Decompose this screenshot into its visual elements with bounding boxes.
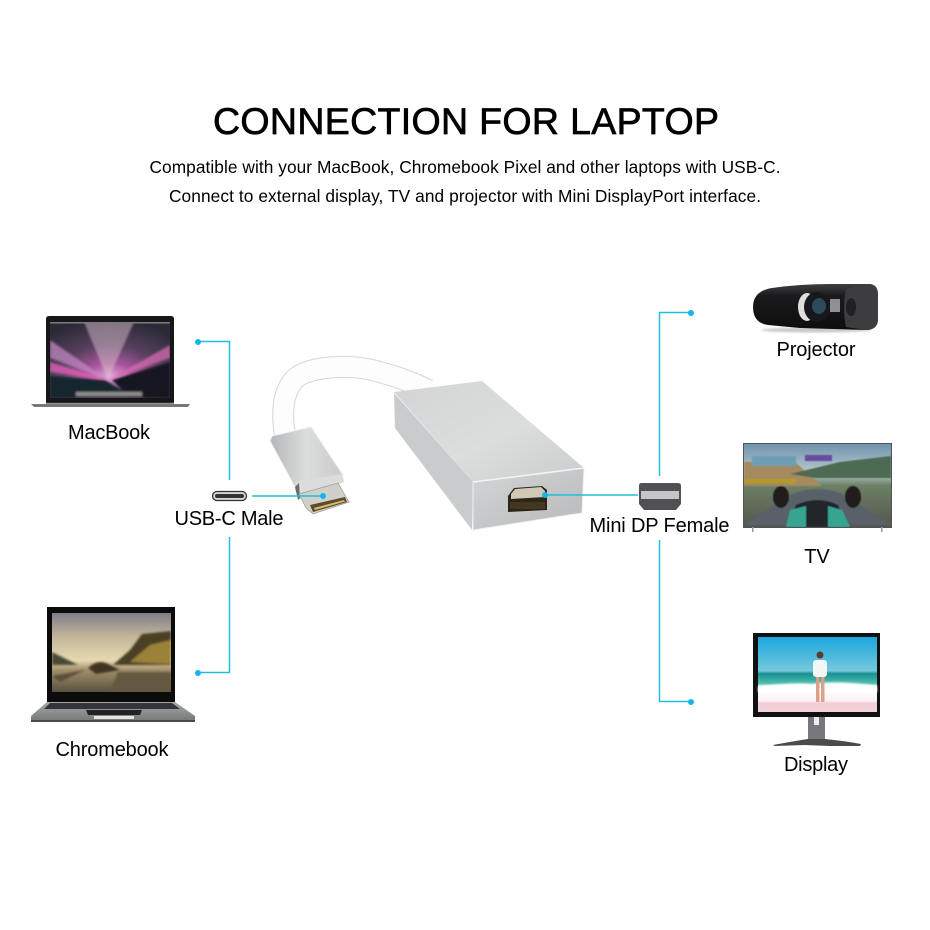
label: TV: TV [804,546,830,568]
connector lines: displays [660,310,694,705]
subtitle: Connect to external display, TV and projector with Mini DisplayPort interface. [169,186,761,206]
adapter body top [394,381,584,482]
TV [743,443,892,532]
icon: USB-C port [212,492,246,500]
adapter product photo [270,367,584,530]
callout line: USB-C plug [252,493,326,499]
projector [753,284,878,332]
monitor display [753,633,880,746]
connector lines: laptops [195,339,230,676]
Chromebook laptop [31,607,195,722]
subtitle [150,157,780,206]
USB-C plug [299,483,349,514]
label: USB-C Male: USB-C Male [174,508,284,530]
label: MacBook: MacBook [68,422,151,444]
label: Chromebook: Chromebook [56,739,170,761]
label: Projector: Projector [776,339,856,361]
icon: Mini DP connector [639,483,681,510]
Mini DP port [508,486,547,512]
USB-C housing [270,427,343,500]
callout line: Mini DP port [542,492,638,498]
MacBook laptop [31,316,190,407]
cable [283,367,428,434]
subtitle: Compatible with your MacBook, Chromebook Pixel and other laptops with USB-C. [150,157,780,177]
adapter body side [394,393,473,530]
adapter body front [473,468,584,530]
label: Display: Display [784,754,848,776]
title: CONNECTION FOR LAPTOP [213,100,719,142]
label: Mini DP Female: Mini DP Female [590,515,730,537]
